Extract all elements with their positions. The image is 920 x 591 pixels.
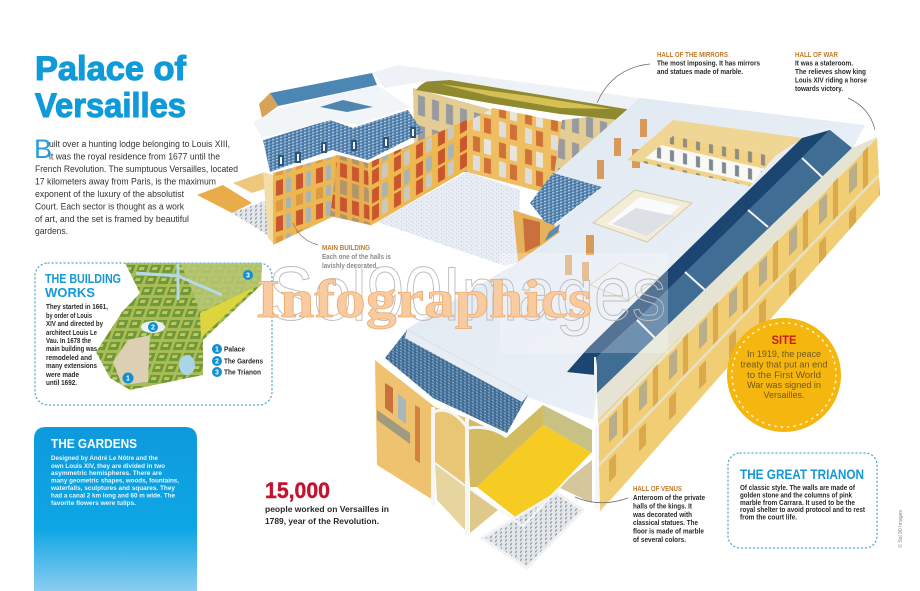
callout: hall of war: Louis XIV riding a horse: [795, 78, 867, 84]
callout: main building: lavishly decorated.: [322, 263, 378, 270]
title: Palace of: [35, 50, 187, 88]
gardens text: waterfalls, sculptures and squares. They: [50, 485, 175, 492]
callout: hall of war: towards victory.: [795, 86, 843, 93]
heading: the building works: THE BUILDING: [45, 272, 121, 286]
back facade with gold ceiling: [372, 65, 640, 195]
callout: hall of venus: halls of the kings. It: [633, 504, 693, 510]
great trianon panel: [728, 453, 877, 548]
intro text block: it was the royal residence from 1677 until the: [49, 152, 220, 162]
callout: hall of the mirrors: HALL OF THE MIRRORS: [657, 52, 728, 59]
building works text: by order of Louis: [46, 313, 92, 320]
building works text: main building was: [46, 346, 97, 353]
great trianon panel: royal shelter to avoid protocol and to rest: [740, 507, 866, 514]
east facade: [597, 137, 880, 512]
building works text: until 1692.: [46, 380, 77, 387]
building works text: XIV and directed by: [46, 321, 103, 328]
site badge: [727, 318, 841, 432]
map legend: [212, 344, 263, 377]
callout: hall of venus: [575, 486, 705, 544]
intro text block: French Revolution. The sumptuous Versailles, located: [35, 164, 238, 174]
callout: main building: MAIN BUILDING: [322, 245, 370, 252]
watermark: Sol90Images: [268, 252, 666, 337]
great trianon panel: golden stone and the columns of pink: [740, 492, 852, 500]
left wing floors: [197, 173, 272, 238]
watermark: Infographics: [256, 269, 592, 329]
cutaway rooms: [433, 405, 597, 568]
map markers: 2: [151, 324, 155, 332]
intro text block: exponent of the luxury of the absolutist: [35, 189, 184, 199]
gardens text: asymmetric hemispheres. There are: [51, 470, 162, 477]
map legend: The Gardens: [224, 358, 263, 366]
great trianon panel: Of classic style. The walls are made of: [740, 485, 856, 492]
callout: hall of venus: was decorated with: [632, 512, 692, 519]
east blue roof: [567, 130, 852, 393]
statistic: 15,000 workers: people worked on Versailles in: [265, 504, 389, 514]
palace cutaway illustration: [197, 65, 880, 568]
callout: hall of the mirrors: [597, 52, 760, 103]
south pavilion: [375, 330, 528, 500]
map legend: Palace: [224, 346, 245, 354]
building works text: [45, 304, 108, 387]
site badge: to the First World: [747, 370, 821, 380]
map markers: 3: [246, 272, 250, 280]
building works text: They started in 1661,: [46, 304, 108, 311]
gardens text: own Louis XIV, they are divided in two: [51, 463, 165, 470]
third light well: [590, 263, 660, 300]
building works text: remodeled and: [46, 355, 92, 362]
map legend: 3: [215, 370, 219, 376]
callout: hall of venus: HALL OF VENUS: [633, 486, 682, 493]
intro text block: uilt over a hunting lodge belonging to Louis XIII,: [49, 139, 230, 149]
intro text block: B: [34, 134, 52, 164]
central pavilion: [513, 173, 602, 262]
heading: the gardens: THE GARDENS: [51, 437, 137, 451]
great trianon panel: marble from Carrara. It used to be the: [740, 500, 855, 507]
statistic: 15,000 workers: 15,000: [265, 478, 330, 503]
gardens text: favorite flowers were tulips.: [51, 500, 136, 507]
callout: hall of war: HALL OF WAR: [795, 52, 838, 59]
intro text block: of art, and the set is framed by beautiful: [35, 214, 189, 224]
callout: hall of venus: classical statues. The: [633, 520, 698, 527]
great trianon panel: THE GREAT TRIANON: [740, 466, 864, 482]
callout: hall of the mirrors: The most imposing. It has mirrors: [657, 60, 760, 68]
inner light well: [593, 190, 692, 242]
map markers: 1: [126, 376, 130, 382]
heading: the building works: WORKS: [45, 286, 95, 300]
callout: hall of venus: of several colors.: [633, 537, 686, 544]
copyright: © Sol 90 Images: [897, 509, 904, 548]
callout: hall of war: The relieves show king: [795, 69, 866, 76]
callout: hall of the mirrors: and statues made of marble.: [657, 69, 743, 76]
map legend: The Trianon: [224, 370, 261, 376]
intro text block: gardens.: [35, 226, 68, 236]
building works text: architect Louis Le: [46, 330, 97, 337]
great trianon panel: from the court life.: [740, 514, 797, 522]
map markers: [122, 270, 253, 384]
map legend: 2: [215, 358, 219, 366]
intro text block: 17 kilometers away from Paris, is the maximum: [35, 176, 216, 186]
site badge: War was signed in: [747, 380, 821, 390]
dormers: [279, 128, 415, 165]
heading: the building works: [45, 272, 121, 300]
callout: hall of war: [795, 52, 875, 130]
building works text: many extensions: [46, 363, 97, 370]
gardens map: [96, 263, 262, 390]
building works text: Vau. In 1678 the: [46, 338, 91, 345]
callout: hall of war: It was a stateroom.: [795, 60, 853, 68]
gardens text: many geometric shapes, woods, fountains,: [51, 478, 179, 484]
callout: main building: Each one of the halls is: [322, 254, 391, 261]
intro text block: Court. Each sector is thought as a work: [35, 202, 184, 212]
callout: hall of venus: Anteroom of the private: [633, 495, 705, 502]
statistic: 15,000 workers: 1789, year of the Revolution.: [265, 516, 379, 526]
callout: main building: [293, 223, 391, 270]
callout: hall of venus: floor is made of marble: [633, 528, 704, 536]
gardens text: Designed by André Le Nôtre and the: [51, 455, 158, 462]
site badge: SITE: [772, 333, 796, 347]
title: [35, 50, 187, 125]
gardens text: [50, 455, 179, 507]
site badge: Versailles.: [764, 390, 804, 400]
statistic: 15,000 workers: [265, 478, 389, 526]
building works panel: [35, 263, 272, 405]
courtyard: [377, 172, 520, 266]
gardens panel: [34, 427, 197, 591]
map legend: 1: [215, 346, 219, 354]
chimneys: [565, 119, 647, 281]
title: Versailles: [35, 87, 186, 125]
main building west wing: [253, 73, 467, 245]
main white roof: [405, 98, 865, 420]
gardens text: had a canal 2 km long and 60 m wide. The: [51, 492, 175, 500]
intro text block: [34, 134, 238, 236]
site badge: In 1919, the peace: [747, 349, 821, 359]
building works text: were made: [45, 372, 79, 379]
site badge: treaty that put an end: [740, 360, 828, 370]
east courtyard: [627, 120, 803, 186]
